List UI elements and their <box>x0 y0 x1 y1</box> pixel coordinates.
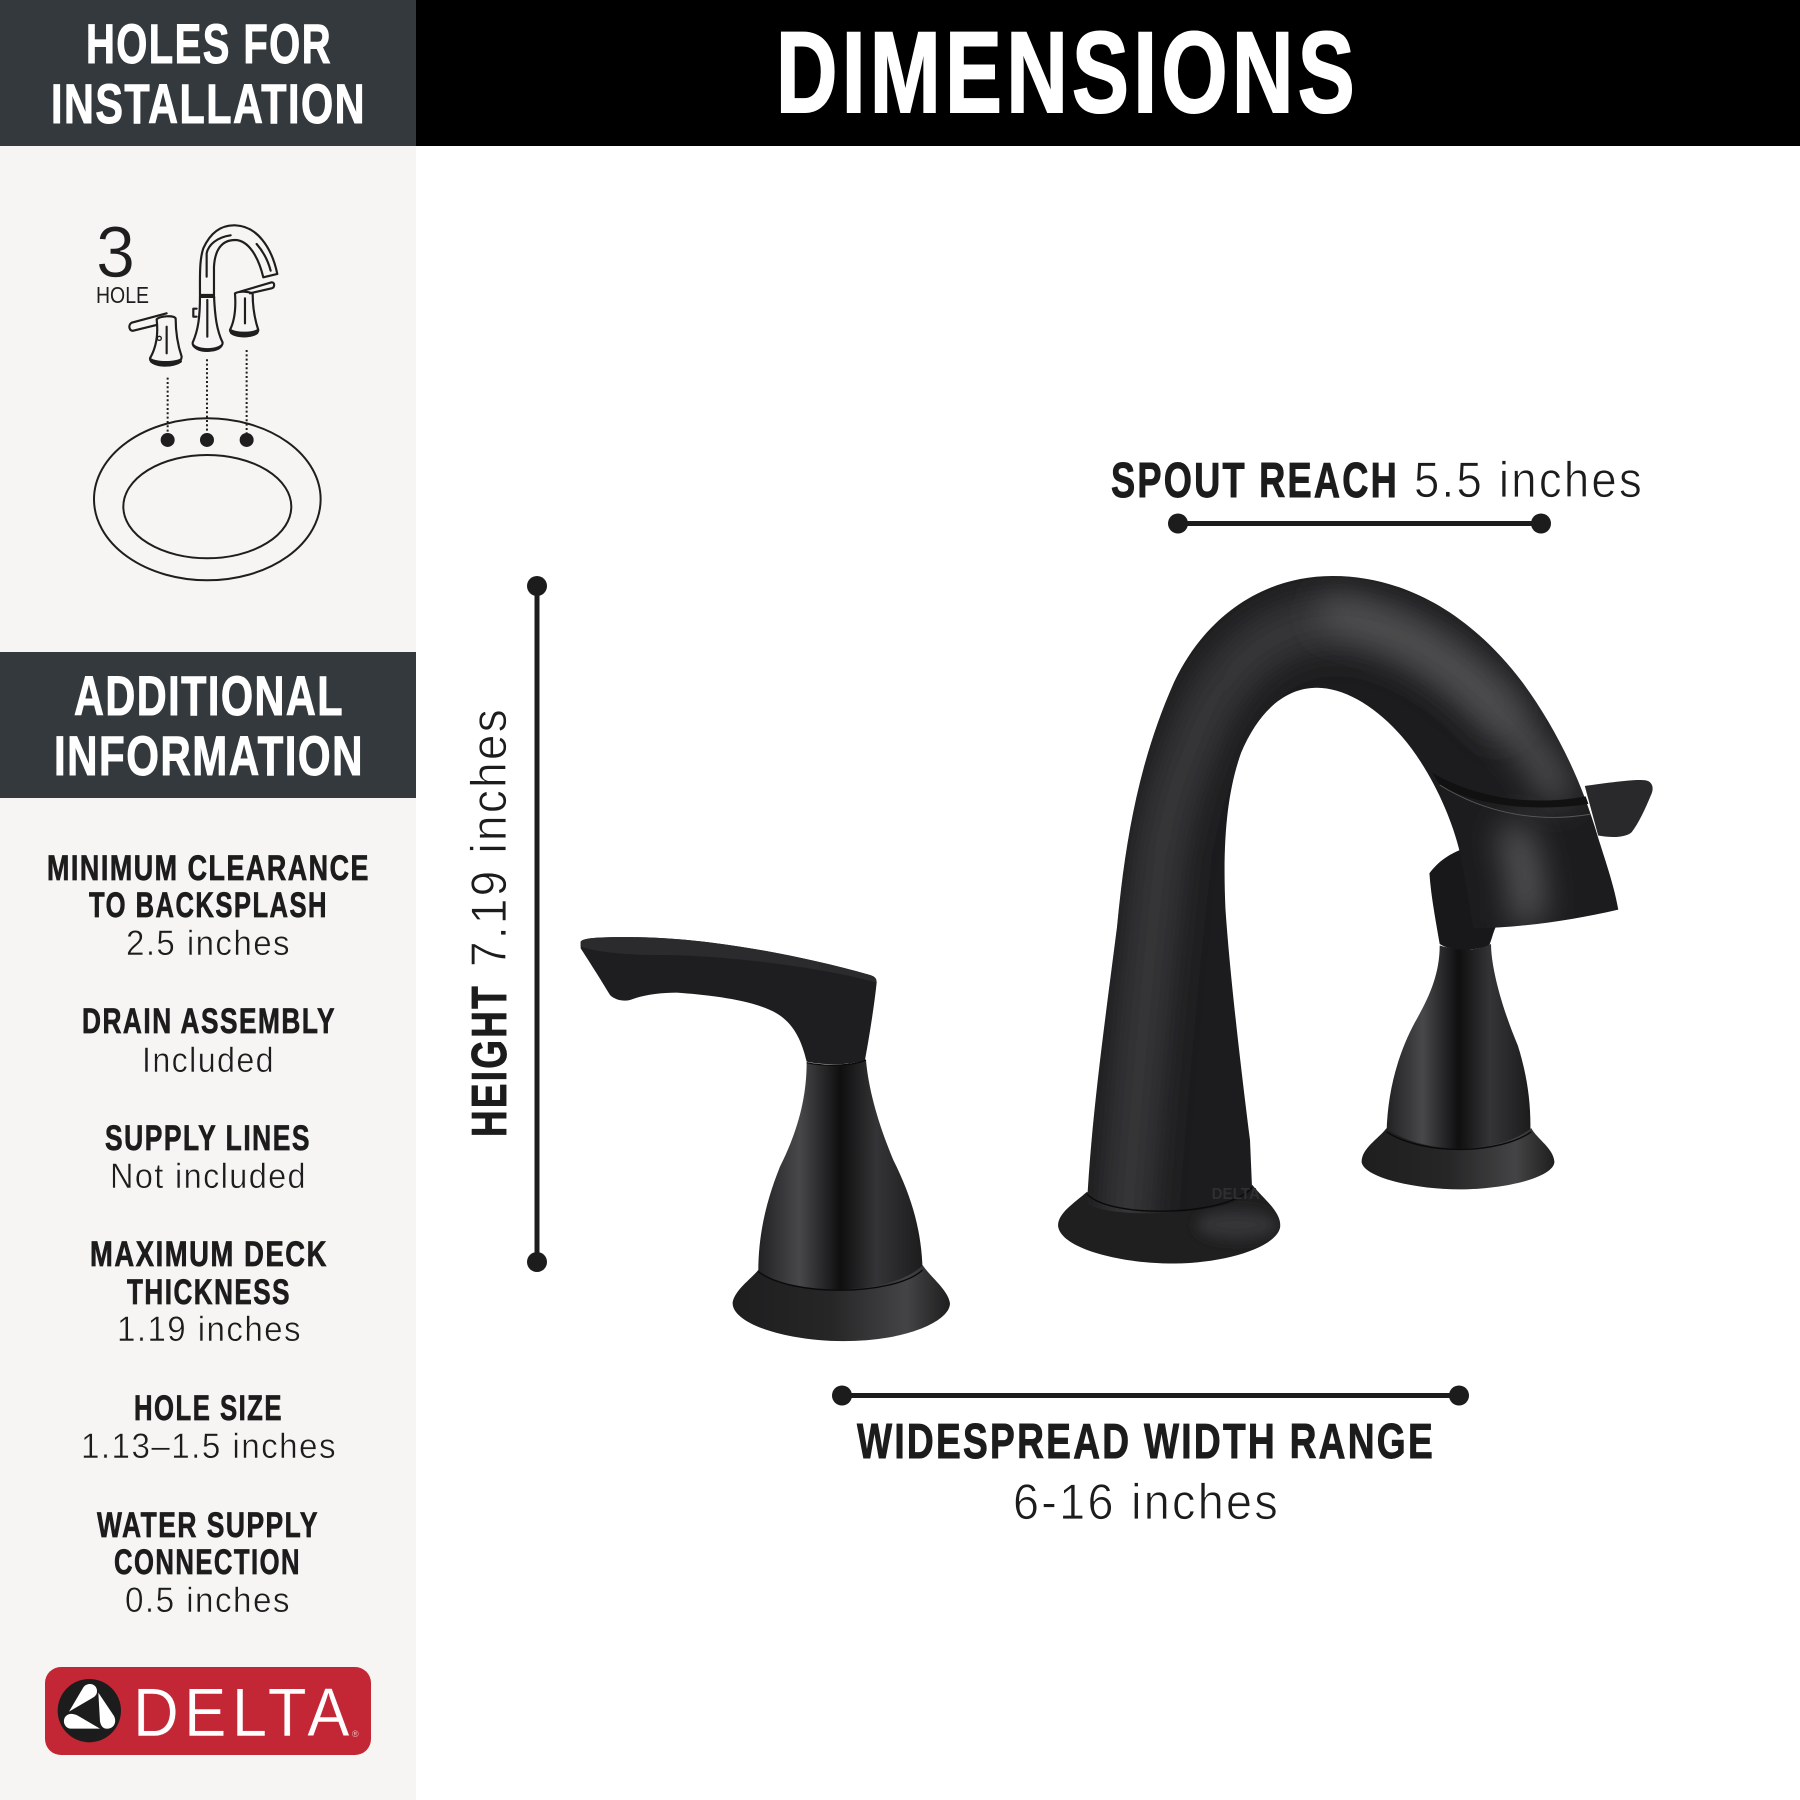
heading: holes for installation: INSTALLATION <box>51 72 366 135</box>
panel: additional information header <box>0 652 416 798</box>
panel: holes for installation header <box>0 0 416 146</box>
dimension: widespread width range <box>832 1386 1469 1530</box>
text block: maximum deck thickness: 1.19 inches <box>117 1310 302 1349</box>
panel: dimensions header <box>416 0 1800 146</box>
arrow: height measure line <box>527 576 547 1272</box>
label: widespread width range 6-16 inches: WIDESPREAD WIDTH RANGE <box>857 1415 1435 1469</box>
image: left faucet handle <box>581 937 950 1341</box>
text block: minimum clearance: 2.5 inches <box>126 924 291 963</box>
right handle cone <box>1387 944 1530 1150</box>
dimension: spout reach <box>1111 452 1644 534</box>
heading: additional information: INFORMATION <box>54 724 364 787</box>
spout seam <box>1432 773 1588 807</box>
right handle base <box>1362 1128 1554 1189</box>
logo: delta <box>45 1667 371 1755</box>
icon: delta triangle mark <box>58 1679 121 1742</box>
text block: drain assembly: DRAIN ASSEMBLY <box>82 1002 336 1041</box>
text block: maximum deck thickness: MAXIMUM DECK <box>90 1235 328 1274</box>
left handle top facet <box>581 937 877 983</box>
label: widespread width range 6-16 inches: 6-16 inches <box>1013 1474 1280 1530</box>
text block: drain assembly: Included <box>142 1041 275 1080</box>
left handle lever <box>581 937 877 1064</box>
text block: water supply connection: WATER SUPPLY <box>97 1506 319 1545</box>
label: height 7.19 inches <box>461 707 517 1137</box>
heading: holes for installation: HOLES FOR <box>86 12 332 75</box>
text block: drain assembly <box>82 1002 336 1080</box>
heading: holes for installation <box>51 12 366 135</box>
left handle cone <box>758 1060 923 1290</box>
arrow: spout reach measure line <box>1168 514 1551 534</box>
icon: three hole faucet and sink diagram <box>94 213 321 580</box>
label: 3 hole <box>96 213 149 308</box>
text block: water supply connection: CONNECTION <box>114 1543 301 1582</box>
text block: water supply connection: 0.5 inches <box>125 1581 291 1620</box>
text block: minimum clearance: MINIMUM CLEARANCE <box>47 849 370 888</box>
text block: hole size: 1.13–1.5 inches <box>81 1427 337 1466</box>
heading: additional information <box>54 664 364 787</box>
spout base <box>1058 1184 1280 1264</box>
heading: dimensions: DIMENSIONS <box>776 9 1359 137</box>
logo: delta: ® <box>352 1729 359 1739</box>
label: widespread width range 6-16 inches <box>857 1415 1435 1530</box>
icon: sink with three holes <box>94 350 321 580</box>
text block: hole size <box>81 1389 337 1466</box>
engraved brand: DELTA <box>1212 1186 1260 1203</box>
panel: sidebar background <box>0 146 416 1800</box>
label: 3 hole: HOLE <box>96 282 149 308</box>
image: faucet spout and right handle <box>1054 576 1653 1267</box>
label: 3 hole: 3 <box>96 213 135 293</box>
left handle base <box>733 1265 950 1341</box>
text block: supply lines <box>105 1119 311 1196</box>
icon: faucet line drawing <box>129 225 277 366</box>
text block: supply lines: Not included <box>110 1157 307 1196</box>
right handle post <box>1429 848 1496 950</box>
heading: additional information: ADDITIONAL <box>74 664 344 727</box>
label: height 7.19 inches: HEIGHT <box>463 984 517 1137</box>
label: height 7.19 inches: 7.19 inches <box>461 707 517 967</box>
text block: minimum clearance <box>47 849 370 963</box>
logo: delta: DELTA <box>133 1674 355 1751</box>
text block: water supply connection <box>97 1506 319 1620</box>
label: spout reach 5.5 inches: 5.5 inches <box>1414 452 1644 508</box>
text block: maximum deck thickness: THICKNESS <box>127 1273 291 1312</box>
label: spout reach 5.5 inches: SPOUT REACH <box>1111 454 1399 508</box>
arrow: width measure line <box>832 1386 1469 1406</box>
dimension: height <box>461 576 547 1272</box>
text block: minimum clearance: TO BACKSPLASH <box>89 886 328 925</box>
text block: maximum deck thickness <box>90 1235 328 1349</box>
text block: supply lines: SUPPLY LINES <box>105 1119 311 1158</box>
right handle lever <box>1585 780 1653 837</box>
spout body <box>1087 576 1618 1213</box>
text block: hole size: HOLE SIZE <box>134 1389 283 1428</box>
